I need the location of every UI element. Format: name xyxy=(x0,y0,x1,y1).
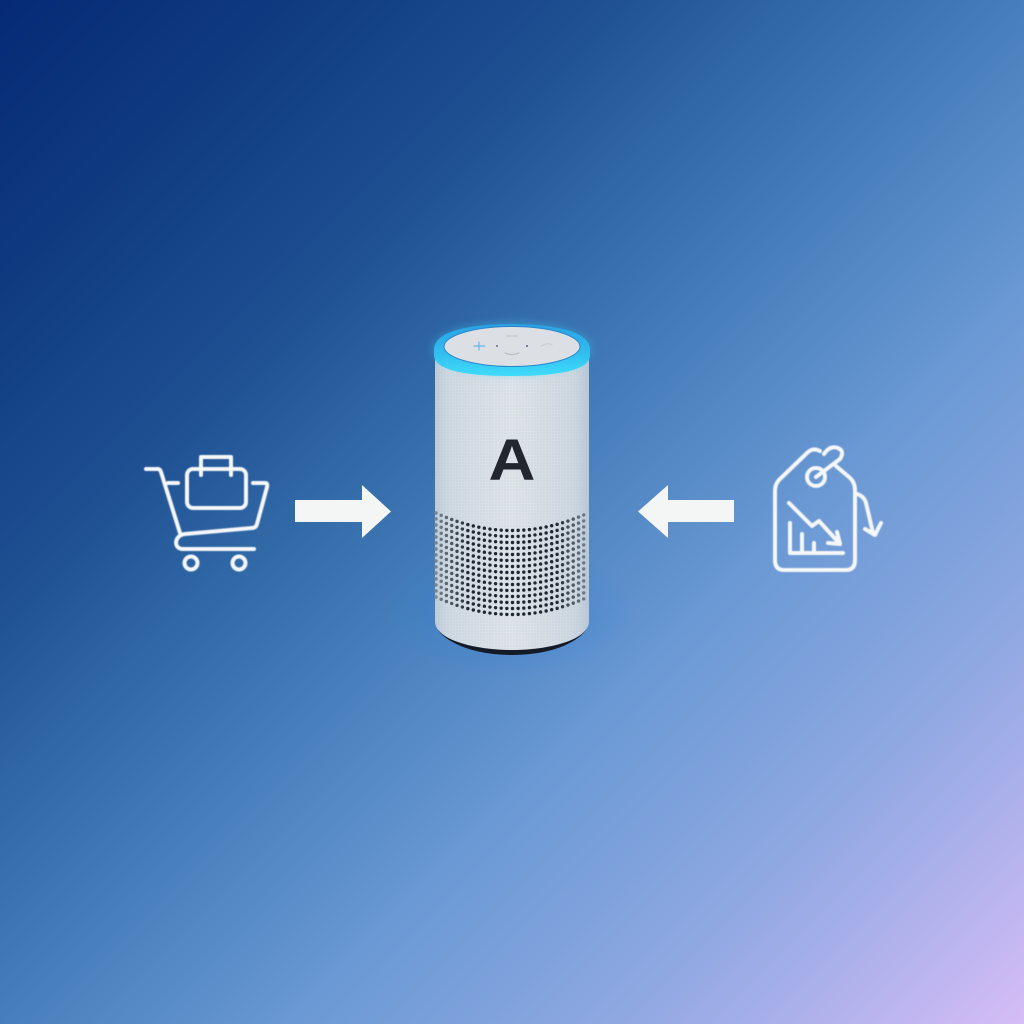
icon: shopping cart with briefcase xyxy=(146,457,267,570)
tag hole and string xyxy=(807,447,842,486)
speaker logo letter: A xyxy=(489,428,535,493)
outer downward arrow xyxy=(857,494,881,535)
light ring glow xyxy=(434,324,590,374)
speaker grille dots xyxy=(436,513,588,614)
speaker body xyxy=(435,350,589,650)
top panel buttons xyxy=(474,336,552,354)
arrow: left pointing into speaker xyxy=(638,485,734,538)
arrow: right pointing into speaker xyxy=(295,485,391,538)
smart speaker xyxy=(387,324,637,677)
falling line chart xyxy=(789,503,843,553)
speaker base xyxy=(438,630,586,655)
briefcase xyxy=(187,457,246,508)
icon: price tag with falling chart xyxy=(775,447,881,570)
light ring xyxy=(434,324,590,376)
speaker top panel xyxy=(444,326,580,366)
speaker floor glow xyxy=(387,547,637,677)
